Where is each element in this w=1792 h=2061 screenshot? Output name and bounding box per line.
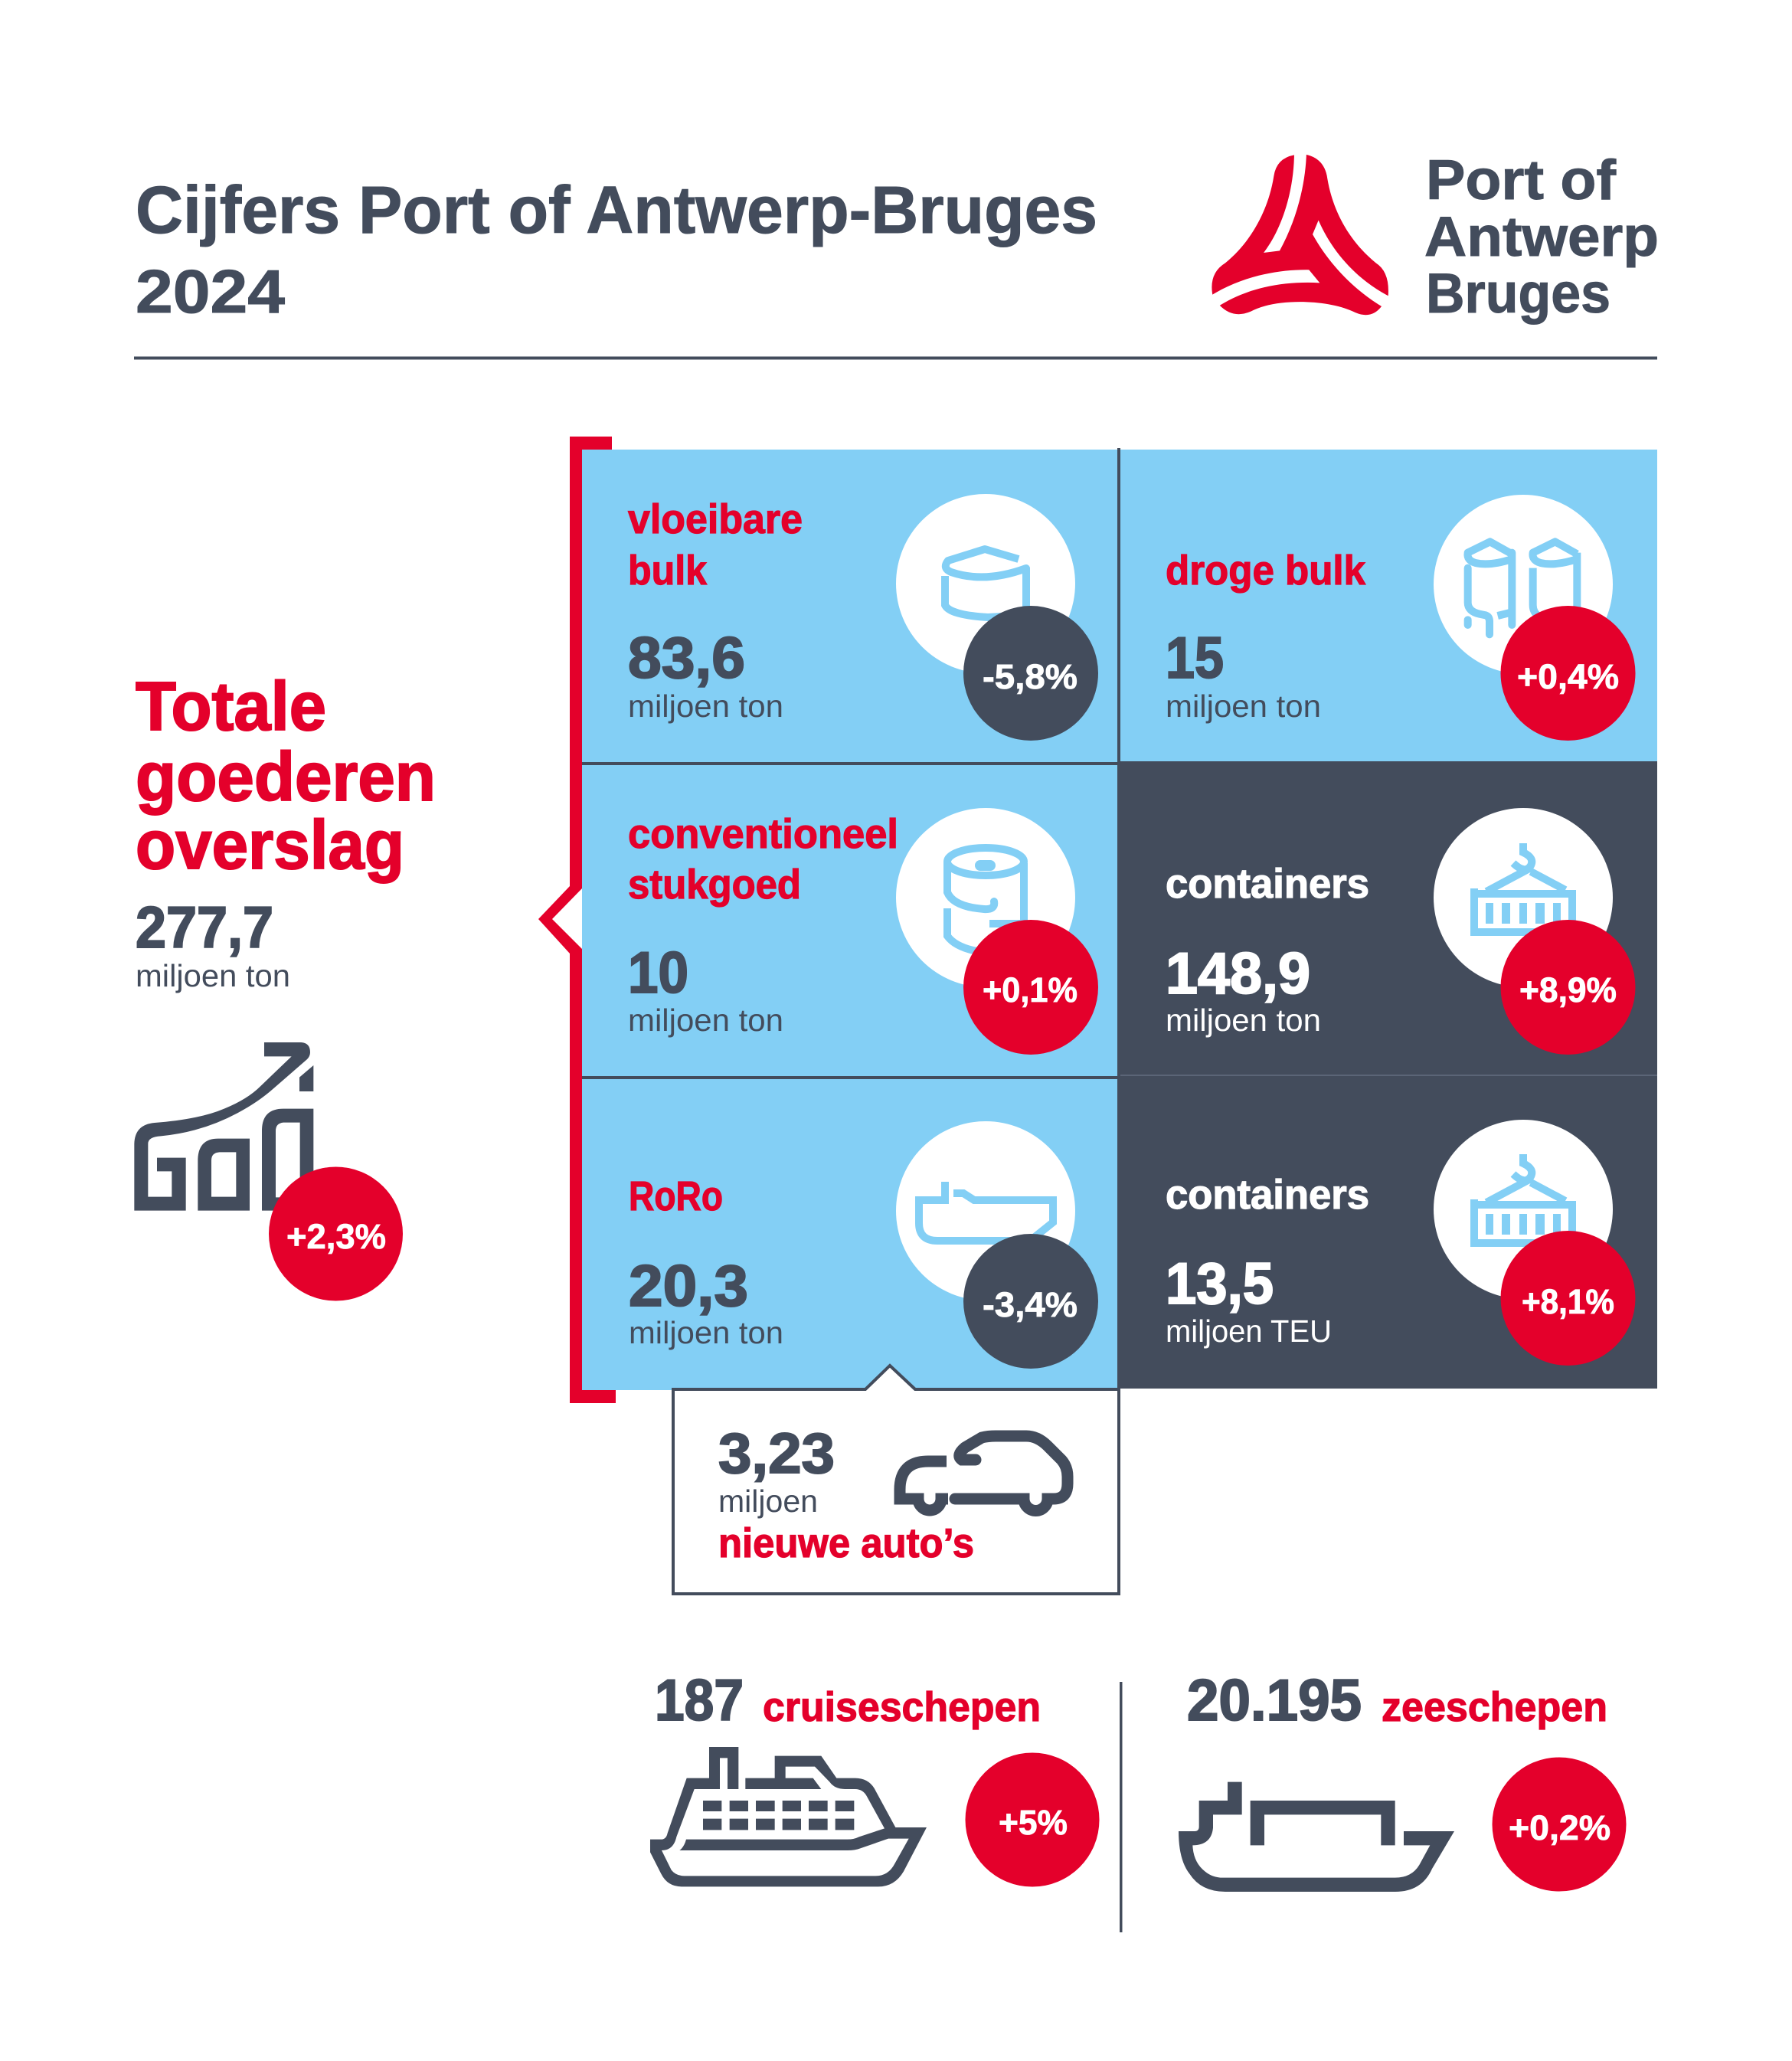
tile value: 148,9: [1166, 941, 1310, 1006]
tile heading: vloeibare: [628, 496, 803, 542]
tile: droge bulk: [1120, 450, 1657, 761]
tile: vloeibare bulk: [582, 450, 1119, 764]
total value: miljoen ton: [136, 958, 290, 993]
tile heading: [628, 496, 803, 594]
icon: cruise ship: [650, 1747, 927, 1886]
logo mark: [1210, 152, 1391, 315]
tile heading: containers: [1166, 861, 1369, 907]
stat text: 20.195: [1187, 1668, 1362, 1733]
total value: 277,7: [136, 895, 273, 960]
tile heading: droge bulk: [1166, 548, 1366, 594]
badge: +0,1%: +0,1%: [983, 970, 1077, 1009]
tile value: [628, 626, 783, 724]
stat: 187 cruiseschepen: [650, 1668, 1100, 1887]
badge: -3,4%: [963, 1234, 1098, 1369]
tile value: 83,6: [628, 626, 745, 691]
stat text: cruiseschepen: [763, 1684, 1041, 1730]
tile value: [628, 941, 783, 1038]
heading: totale goederen overslag: overslag: [136, 807, 404, 884]
icon: growth chart: [134, 1042, 313, 1211]
tile value: miljoen ton: [1166, 689, 1321, 724]
callout value: [718, 1421, 974, 1566]
stat text: zeeschepen: [1382, 1684, 1607, 1730]
icon: drum: [896, 808, 1075, 987]
badge: -3,4%: -3,4%: [983, 1285, 1077, 1324]
logo wordmark: Port of: [1426, 149, 1617, 211]
tile value: 15: [1166, 626, 1224, 691]
tile value: 13,5: [1166, 1251, 1274, 1317]
badge: +2,3%: +2,3%: [286, 1217, 386, 1256]
icon: car: [900, 1436, 1068, 1510]
logo wordmark: Bruges: [1426, 263, 1611, 325]
tile value: [629, 1254, 783, 1350]
stat: 20.195 zeeschepen: [1179, 1668, 1627, 1892]
stat text: [655, 1668, 1041, 1733]
heading: totale goederen overslag: Totale: [136, 669, 326, 745]
badge: +0,2%: [1492, 1757, 1627, 1892]
panel: totale goederenoverslag: [134, 669, 436, 1300]
badge: -5,8%: -5,8%: [983, 657, 1077, 696]
bracket: [538, 437, 616, 1403]
tile value: miljoen ton: [628, 1003, 783, 1038]
tile value: miljoen TEU: [1166, 1313, 1332, 1349]
icon: cargo ship: [1179, 1782, 1454, 1892]
stat text: 187: [655, 1668, 744, 1733]
title: 2024: [136, 257, 286, 326]
callout value: 3,23: [718, 1421, 835, 1485]
tile value: [1166, 941, 1321, 1038]
badge: +2,3%: [269, 1167, 403, 1300]
title: [136, 173, 1097, 326]
badge: +8,1%: +8,1%: [1522, 1282, 1614, 1321]
icon: silos: [1434, 495, 1636, 741]
badge: +5%: +5%: [999, 1803, 1068, 1842]
tile heading: containers: [1166, 1172, 1369, 1218]
badge: +0,2%: +0,2%: [1509, 1808, 1611, 1847]
tile: containers miljoen TEU: [1120, 1075, 1657, 1389]
icon: container on crane: [1434, 1120, 1613, 1299]
icon: container on crane: [1434, 808, 1613, 987]
heading: totale goederen overslag: [136, 669, 436, 884]
heading: totale goederen overslag: goederen: [136, 739, 436, 816]
tile heading: stukgoed: [628, 862, 801, 908]
title: Cijfers Port of Antwerp-Bruges: [136, 173, 1097, 247]
tile heading: [628, 811, 898, 908]
badge: +0,1%: [963, 920, 1098, 1055]
badge: +8,1%: [1501, 1231, 1636, 1366]
tile value: [1166, 1251, 1332, 1349]
stat text: [1187, 1668, 1607, 1733]
badge: +0,4%: +0,4%: [1517, 657, 1619, 696]
logo wordmark: Antwerp: [1424, 206, 1659, 268]
tile value: 20,3: [629, 1254, 748, 1319]
badge: +5%: [965, 1752, 1100, 1887]
tile: containers miljoen ton: [1120, 761, 1657, 1075]
tile value: miljoen ton: [628, 689, 783, 724]
badge: +0,4%: [1501, 606, 1636, 741]
icon: RoRo ship: [896, 1121, 1075, 1300]
tile value: miljoen ton: [1166, 1003, 1321, 1038]
badge: +8,9%: +8,9%: [1519, 970, 1617, 1009]
callout value: nieuwe auto’s: [718, 1520, 974, 1566]
logo wordmark: [1424, 149, 1659, 325]
tile heading: bulk: [628, 548, 708, 594]
tile: conventioneel stukgoed: [582, 764, 1119, 1078]
callout: nieuwe auto's: [673, 1366, 1119, 1594]
total value: [136, 895, 290, 993]
logo: Port of Antwerp Bruges: [1210, 149, 1659, 325]
tile heading: conventioneel: [628, 811, 898, 857]
callout value: miljoen: [718, 1484, 818, 1519]
tile heading: RoRo: [629, 1173, 723, 1219]
badge: -5,8%: [963, 606, 1098, 741]
tile: RoRo: [582, 1078, 1119, 1390]
icon: tank: [896, 494, 1075, 673]
tile value: [1166, 626, 1321, 724]
tile value: 10: [628, 941, 688, 1006]
tile value: miljoen ton: [629, 1315, 783, 1350]
badge: +8,9%: [1501, 920, 1636, 1055]
